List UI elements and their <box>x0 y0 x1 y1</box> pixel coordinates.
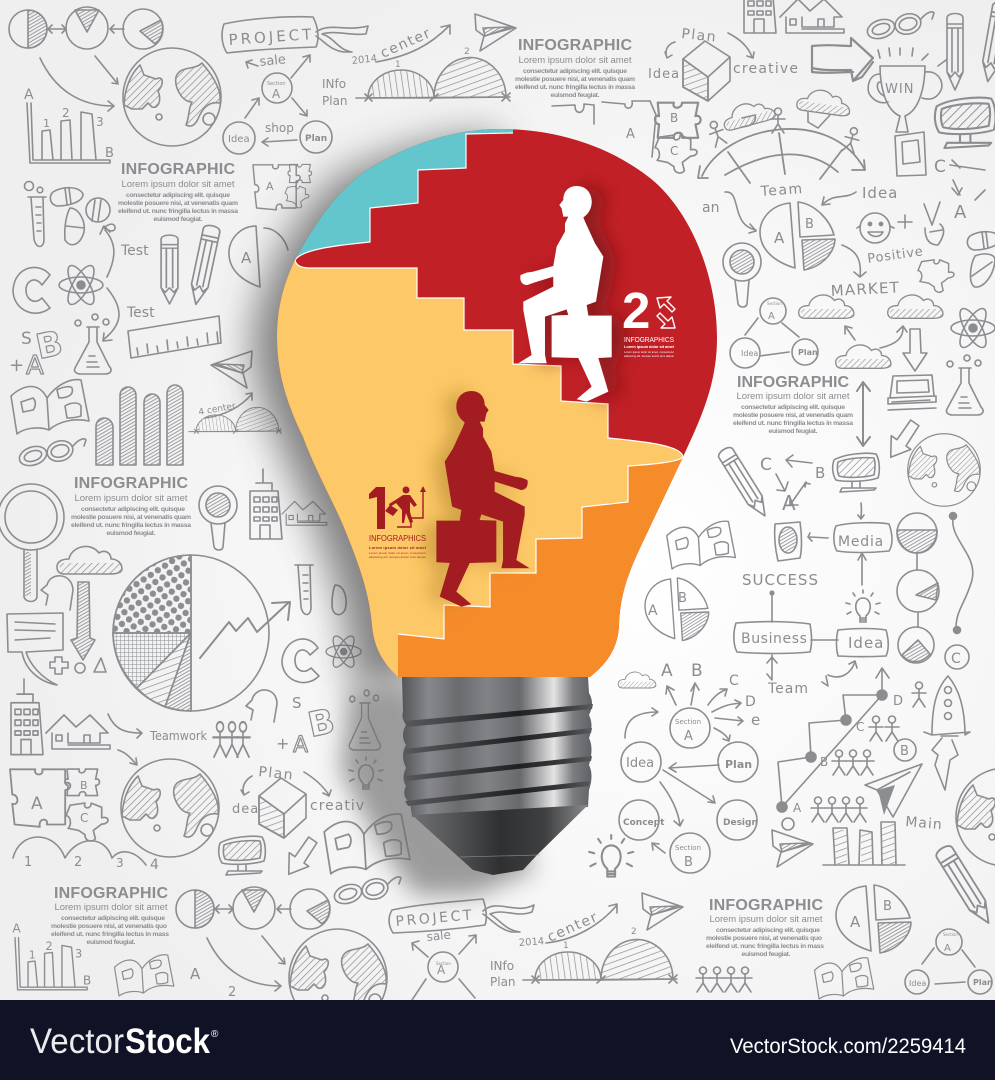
footer band <box>0 1000 995 1080</box>
infographic text: right: euismod feugiat. <box>768 428 818 435</box>
doodle: section A sale idea plan cluster: Section <box>267 81 286 87</box>
doodle: section triangle <box>730 298 818 368</box>
doodle: arrow lower <box>279 833 323 881</box>
number 2 block: 2 <box>622 282 650 339</box>
doodle: bar chart top left: 2 <box>62 106 70 120</box>
doodle: snake line and C <box>945 512 973 669</box>
infographic text: left middle: euismod feugiat. <box>106 530 156 537</box>
doodle: atom right <box>951 305 995 351</box>
number 1 block: INFOGRAPHICS <box>369 534 426 543</box>
doodle: domes chart top: INfo <box>322 77 346 91</box>
doodle: S A B flask left <box>9 314 111 381</box>
doodle: bottom plane <box>642 893 683 930</box>
doodle: big magnifier <box>0 484 64 602</box>
doodle: large paper plane <box>865 764 943 833</box>
infographic text: top center: consectetur adipiscing elit. quisque <box>523 68 627 75</box>
infographic text: top center: molestie posuere nisi, at venenatis quam <box>515 76 635 83</box>
doodle: glasses left <box>17 438 86 469</box>
bulb shadow <box>252 135 535 895</box>
doodle: success business idea team: Team <box>767 681 809 697</box>
doodle: pie A B mid right: A <box>648 603 658 619</box>
doodle: test and ruler <box>126 305 221 358</box>
doodle: section A sale idea plan cluster: Idea <box>228 134 250 145</box>
infographic text: left middle: eleifend ut. nunc fringilla lectus in massa <box>71 522 191 529</box>
doodle: head lower <box>246 690 277 722</box>
doodle: S B A flask lower: + <box>276 734 289 753</box>
doodle: section A sale idea plan cluster: sale <box>259 52 287 70</box>
doodle: C atom lower <box>282 633 361 683</box>
doodle: head and hatched arrow <box>41 576 95 660</box>
doodle: cube lower: dea <box>232 802 259 817</box>
doodle: S A B flask left: S <box>21 329 32 349</box>
number 1 block: Lorem ipsum dolor sit amet, consectetur <box>369 551 426 555</box>
infographic text: right <box>733 374 853 435</box>
doodle: bottom section triangle: A <box>944 943 951 954</box>
light bulb glass <box>260 120 730 680</box>
infographic text: top center: eleifend ut. nunc fringilla lectus in massa <box>515 84 635 91</box>
doodle: bottom section triangle <box>905 929 993 994</box>
infographic text: top center <box>515 37 635 99</box>
doodle: project tag: PROJECT <box>228 25 315 49</box>
doodle: positive face hand: Positive <box>866 244 925 267</box>
infographic text: bottom right: Lorem ipsum dolor sit amet <box>710 914 823 925</box>
doodle: bar chart bottom: 2 <box>45 940 53 953</box>
doodle: success business idea team: Idea <box>848 634 884 652</box>
doodle: double arrow vertical <box>857 382 870 446</box>
doodle: glasses bottom <box>332 876 401 907</box>
doodle: pie balls <box>897 513 939 663</box>
doodle: section A idea plan concept cluster: A <box>684 729 693 744</box>
infographic text: left middle: consectetur adipiscing elit. quisque <box>81 506 185 513</box>
stair edge highlights <box>295 133 683 639</box>
doodle: cloud with letters: D <box>745 694 756 710</box>
doodle: bottom project tag <box>389 899 534 933</box>
doodle: abc triangle: C <box>760 455 772 475</box>
doodle: bulb left lower <box>349 757 383 789</box>
doodle: small domes <box>189 393 281 433</box>
doodle: plus circle triangle <box>50 657 106 674</box>
doodle: pills and tube left: Test <box>120 243 149 259</box>
doodle: pencil slanted <box>718 446 766 517</box>
doodle: monitor top right <box>935 98 995 148</box>
orange stair panel <box>398 457 730 680</box>
doodle: success business idea team <box>734 571 888 697</box>
doodle: puzzle pieces top center: A <box>626 127 635 142</box>
doodle: domes chart top: 1 <box>395 60 401 70</box>
doodle: globe far right <box>956 768 995 866</box>
doodle: team arc: an <box>702 200 719 216</box>
doodle: book bottom left <box>115 955 174 996</box>
doodle: bottom section triangle: Section <box>943 932 958 937</box>
doodle: bottom section A sale: A <box>437 963 446 977</box>
doodle: S B A flask lower: A <box>293 733 308 758</box>
footer image id: VectorStock.com/2259414 <box>730 1035 966 1058</box>
infographic text: bottom left: euismod feugiat. <box>86 939 136 946</box>
doodle: plane left <box>211 351 252 388</box>
doodle: cloud with letters: A <box>661 661 673 681</box>
doodle: bottom letters: A <box>190 965 201 983</box>
doodle: bar chart top left: 3 <box>96 115 104 129</box>
infographic text: bottom right: INFOGRAPHIC <box>709 897 823 914</box>
infographic text: right: consectetur adipiscing elit. quisque <box>741 404 845 411</box>
infographic text: left middle: INFOGRAPHIC <box>74 475 188 492</box>
doodle: cube lower <box>232 764 365 838</box>
doodle: domes chart top: Plan <box>322 94 348 108</box>
doodle: bar chart top left: B <box>105 146 114 161</box>
doodle: bar chart bottom: 1 <box>29 949 36 961</box>
doodle: bottom domes: 2014 <box>518 936 545 949</box>
doodle: arcs numbers: 1 <box>24 855 32 870</box>
doodle: puzzle near text <box>253 164 312 210</box>
doodle: abc triangle: B <box>815 464 825 482</box>
bulb screw socket <box>402 677 593 875</box>
doodle: puzzle A bottom left: C <box>80 811 88 825</box>
doodle: abc triangle <box>760 455 825 515</box>
doodle: book left <box>11 380 89 434</box>
infographic text: right: molestie posuere nisi, at venenatis quam <box>733 412 853 419</box>
doodle: section A idea plan concept cluster: Design <box>723 818 758 828</box>
doodle: section A idea plan concept cluster: Concept <box>623 818 665 828</box>
number 2 block <box>622 282 675 358</box>
doodle: bottom project tag: PROJECT <box>395 907 475 930</box>
doodle: arcs numbers: 2 <box>74 855 82 870</box>
infographic text: left upper: eleifend ut. nunc fringilla lectus in massa <box>118 208 238 215</box>
doodle: S B A flask lower: B <box>305 701 338 746</box>
doodle: pie A B mid right <box>645 578 709 641</box>
doodle: puzzle near text: A <box>266 180 274 193</box>
doodle: open book lower <box>324 814 410 874</box>
doodle: pie A B bottom: A <box>850 913 861 931</box>
infographic text: left upper <box>118 161 238 223</box>
doodle: domes chart top: 2014 <box>351 53 378 67</box>
doodle: section A sale idea plan cluster <box>223 52 332 154</box>
doodle: small magnifier <box>199 486 237 550</box>
doodle: line chart with people: B <box>820 755 828 769</box>
doodle: bar chart top left: 1 <box>43 117 50 130</box>
doodle: book slanted <box>667 521 735 569</box>
doodle: cube lower: creativ <box>310 798 365 814</box>
doodle: arcs numbers: 3 <box>116 856 124 870</box>
infographic text: left upper: INFOGRAPHIC <box>121 161 235 178</box>
doodle: bottom domes <box>490 904 677 989</box>
doodle: bar chart bottom: A <box>12 921 21 935</box>
doodle: teamwork <box>108 714 250 765</box>
doodle: puzzle A bottom left: B <box>80 779 88 792</box>
doodle: bottom domes: INfo <box>490 959 514 973</box>
doodle: cube idea plan creative: Plan <box>681 26 718 46</box>
doodle: puzzle and pills right edge: C <box>934 157 946 177</box>
doodle: section A sale idea plan cluster: Plan <box>305 134 327 144</box>
infographic text: top center: Lorem ipsum dolor sit amet <box>518 55 632 66</box>
doodle: tube and pill near pie <box>295 565 346 615</box>
doodle: lens right of bulb <box>723 243 761 307</box>
doodle: big arrow right <box>812 38 873 81</box>
doodle: globe lower left <box>121 759 219 857</box>
doodle: pie A partial left <box>229 226 288 287</box>
socket lower cone <box>412 805 588 875</box>
doodle: cloud with letters: C <box>729 673 739 689</box>
number 1 block: adipiscing elit. Aenean auctor arcu aliquet <box>369 555 426 559</box>
doodle: bar chart top left: A <box>24 87 34 103</box>
doodle: pie A partial left: A <box>241 249 252 267</box>
infographic text: top center: INFOGRAPHIC <box>518 37 632 54</box>
doodle: success business idea team: SUCCESS <box>742 571 819 589</box>
doodle: monitor lower <box>219 836 265 875</box>
doodle: arcs numbers: 4 <box>150 857 159 873</box>
infographic text: left upper: euismod feugiat. <box>154 216 203 223</box>
number 2 block: INFOGRAPHICS <box>624 335 674 344</box>
doodle: media box <box>808 503 892 585</box>
doodle: domes chart top: 2 <box>464 47 470 57</box>
doodle: section triangle: Section <box>767 301 782 306</box>
doodle: flask right <box>946 355 983 415</box>
infographic text: bottom right: euismod feugiat. <box>742 951 791 958</box>
doodle: line chart with people: B <box>900 744 909 759</box>
doodle: bottom domes: center <box>545 909 601 946</box>
doodle: success business idea team: Business <box>741 631 808 647</box>
doodle: trophy WIN <box>868 48 946 176</box>
doodle: cloud with letters <box>618 661 760 729</box>
doodle: bottom letters <box>190 965 236 1000</box>
doodle: pencils left <box>161 224 221 306</box>
doodle: media box: Media <box>838 534 884 550</box>
doodle: section triangle: A <box>768 311 775 322</box>
doodle: bottom section triangle: Idea <box>909 979 926 988</box>
doodle: linked pie circles top <box>9 7 163 111</box>
doodle: pie A B mid right: B <box>678 591 687 606</box>
doodle: pills and tube left <box>24 182 149 277</box>
infographic text: bottom right <box>706 897 824 958</box>
infographic text: bottom left <box>51 885 169 946</box>
doodle: glasses top right <box>865 11 934 42</box>
doodle: section triangle: Plan <box>798 348 818 357</box>
doodle: abc triangle: A <box>782 491 796 515</box>
doodle: market text: MARKET <box>830 278 900 300</box>
doodle: team arc: Idea <box>862 184 898 202</box>
infographic text: left middle <box>71 475 191 537</box>
doodle: puzzle pieces top center <box>552 101 701 173</box>
doodle: positive face hand <box>857 202 944 267</box>
doodle: section A idea plan concept cluster <box>619 683 758 873</box>
doodle: bottom domes: 2 <box>631 927 637 937</box>
doodle: cube idea plan creative: creative <box>733 61 799 77</box>
doodle: rocket <box>924 676 970 790</box>
infographic text: left upper: Lorem ipsum dolor sit amet <box>122 179 235 190</box>
infographic text: left upper: molestie posuere nisi, at venenatis quam <box>118 200 238 207</box>
doodle: rounded bar chart <box>96 385 183 465</box>
doodle: S B A flask lower: S <box>292 694 302 712</box>
doodle: pencils top right <box>947 1 995 90</box>
doodle: trio bottom <box>176 887 330 991</box>
doodle: domes chart top <box>322 25 510 108</box>
number 2 block: adipiscing elit. Aenean auctor arcu aliquet <box>624 354 674 358</box>
doodle: section A idea plan concept cluster: Idea <box>626 756 654 771</box>
doodle: puzzle pieces top center: B <box>670 111 678 125</box>
doodle: paper plane top <box>475 14 516 51</box>
doodle: snake line and C: C <box>951 651 961 667</box>
doodle: S A B flask left: B <box>33 323 66 368</box>
doodle: cube idea plan creative <box>648 26 799 101</box>
doodle: cloud left <box>57 546 122 574</box>
doodle: domes chart top: center <box>378 25 434 62</box>
teal stair panel <box>260 120 513 260</box>
doodle: buildings top <box>744 0 844 33</box>
doodle: cube idea plan creative: Idea <box>648 67 680 82</box>
doodle: pie A B top right: B <box>805 217 814 232</box>
footer logo: Stock <box>125 1022 210 1061</box>
doodle: puzzle pieces top center: C <box>670 144 678 158</box>
number 2 block: Lorem ipsum dolor sit amet, consectetur <box>624 350 674 354</box>
doodle: large paper plane: Main <box>905 814 943 833</box>
doodle: building bottom left <box>11 679 43 755</box>
doodle: bottom section A sale: sale <box>426 928 452 944</box>
infographic text: top center: euismod feugiat. <box>550 92 600 99</box>
doodle: cloud with letters: B <box>691 661 703 681</box>
red businessman silhouette <box>436 391 530 607</box>
infographic text: bottom left: Lorem ipsum dolor sit amet <box>54 902 168 913</box>
doodle: globe top left <box>123 48 221 146</box>
infographic text: bottom left: INFOGRAPHIC <box>54 885 168 902</box>
doodle: project tag <box>222 17 368 53</box>
red stair panel <box>260 120 730 680</box>
doodle: clouds and arrows <box>724 90 850 131</box>
doodle: line chart with people: C <box>856 720 864 734</box>
doodle: S B A flask lower <box>276 690 380 758</box>
infographic text: bottom right: consectetur adipiscing elit. quisque <box>716 927 820 934</box>
doodle: speech bubble <box>7 613 63 685</box>
infographic text: left upper: consectetur adipiscing elit. quisque <box>126 192 230 199</box>
doodle: house bottom left <box>46 715 110 749</box>
doodle: pencil big <box>934 843 995 928</box>
doodle: puzzle A bottom left: A <box>31 794 43 814</box>
doodle: section A idea plan concept cluster: Section <box>675 844 701 852</box>
number 1 block <box>369 486 427 559</box>
doodle: market clouds <box>799 295 943 368</box>
infographic text: bottom right: molestie posuere nisi, at venenatis quo <box>706 935 822 942</box>
doodle: globe bottom center <box>289 929 387 1027</box>
doodle: section A idea plan concept cluster: B <box>684 855 693 870</box>
infographic text: bottom left: consectetur adipiscing elit. quisque <box>61 915 165 922</box>
doodle: bulb lower <box>589 835 633 877</box>
doodle: bottom domes: Plan <box>490 975 516 989</box>
infographic text: bottom left: eleifend ut. nunc fringilla lectus in mass <box>51 931 169 938</box>
doodle: pie A B top right: A <box>774 229 785 247</box>
doodle: section A idea plan concept cluster: Plan <box>725 758 752 771</box>
doodle: bar chart bottom <box>12 921 91 990</box>
footer logo: Vector <box>30 1022 124 1061</box>
doodle: phone <box>775 522 802 561</box>
doodle: puzzle and pills right edge <box>918 157 995 292</box>
doodle: pie A B top right <box>725 192 866 277</box>
doodle: small plane and bars <box>772 818 905 867</box>
doodle: teamwork: Teamwork <box>149 729 207 743</box>
footer logo: ® <box>211 1029 219 1040</box>
socket thread grooves <box>405 704 593 806</box>
infographic text: left middle: Lorem ipsum dolor sit amet <box>74 493 188 504</box>
doodle: bottom people <box>696 967 752 992</box>
doodle: bar chart bottom: 3 <box>75 948 82 961</box>
doodle: bar chart top left <box>24 87 114 163</box>
doodle: bottom domes: 1 <box>563 941 569 951</box>
doodle: test and ruler: Test <box>126 305 155 321</box>
doodle: cube lower: Plan <box>258 764 295 784</box>
infographic text: right: Lorem ipsum dolor sit amet <box>736 391 850 402</box>
doodle: arcs numbers <box>13 837 159 873</box>
doodle: down arrow <box>903 329 927 371</box>
doodle: S A B flask left: + <box>9 355 24 376</box>
doodle: big slanted arrow <box>890 419 920 458</box>
white businessman silhouette <box>518 186 612 402</box>
doodle: team arc <box>698 108 898 216</box>
doodle: puzzle A bottom left <box>10 769 108 841</box>
doodle: line chart with people: A <box>793 801 802 815</box>
footer logo <box>30 1022 219 1061</box>
doodle: house mid left <box>282 501 327 525</box>
doodle: globe right <box>908 434 980 506</box>
doodle: section A sale idea plan cluster: A <box>272 87 281 101</box>
doodle: bottom letters: 2 <box>228 985 236 1000</box>
doodle: section triangle: Idea <box>741 349 758 358</box>
doodle: section A idea plan concept cluster: Section <box>675 718 701 726</box>
infographic text: bottom right: eleifend ut. nunc fringilla lectus in mass <box>706 943 824 950</box>
infographic text: left middle: molestie posuere nisi, at venenatis quam <box>71 514 191 521</box>
doodle: team arc: Team <box>759 181 804 200</box>
doodle: line chart with people: D <box>893 694 903 709</box>
doodle: line chart with people <box>777 668 926 822</box>
doodle: monitor right <box>833 453 879 492</box>
doodle: S A B flask left: A <box>26 351 44 381</box>
number 2 block: Lorem ipsum dolor sit amet <box>624 344 675 349</box>
doodle: building mid left <box>250 469 282 539</box>
doodle: section A sale idea plan cluster: shop <box>265 121 294 135</box>
doodle: big pie chart <box>113 555 290 711</box>
infographic text: bottom left: molestie posuere nisi, at venenatis quo <box>51 923 167 930</box>
doodle: puzzle and pills right edge: A <box>954 202 967 223</box>
number 1 block: Lorem ipsum dolor sit amet <box>369 545 427 550</box>
infographic text: right: INFOGRAPHIC <box>737 374 849 391</box>
doodle: letter C and atom <box>13 262 119 341</box>
doodle: bottom section triangle: Plan <box>973 978 993 987</box>
doodle: pie A B bottom <box>836 885 911 953</box>
doodle: bottom section A sale: Section <box>436 961 451 966</box>
yellow stair panel <box>260 260 683 680</box>
doodle: bottom book right <box>815 958 874 999</box>
doodle: cloud with letters: e <box>751 711 760 729</box>
doodle: pie A B bottom: B <box>883 899 892 914</box>
infographic text: right: eleifend ut. nunc fringilla lectus in massa <box>733 420 853 427</box>
doodle: trophy WIN: WIN <box>885 82 914 97</box>
doodle: laptop <box>888 375 936 410</box>
doodle: bar chart bottom: B <box>83 974 91 988</box>
doodle: small domes: 4 center <box>198 402 237 418</box>
doodle: bottom section A sale <box>412 928 476 1000</box>
